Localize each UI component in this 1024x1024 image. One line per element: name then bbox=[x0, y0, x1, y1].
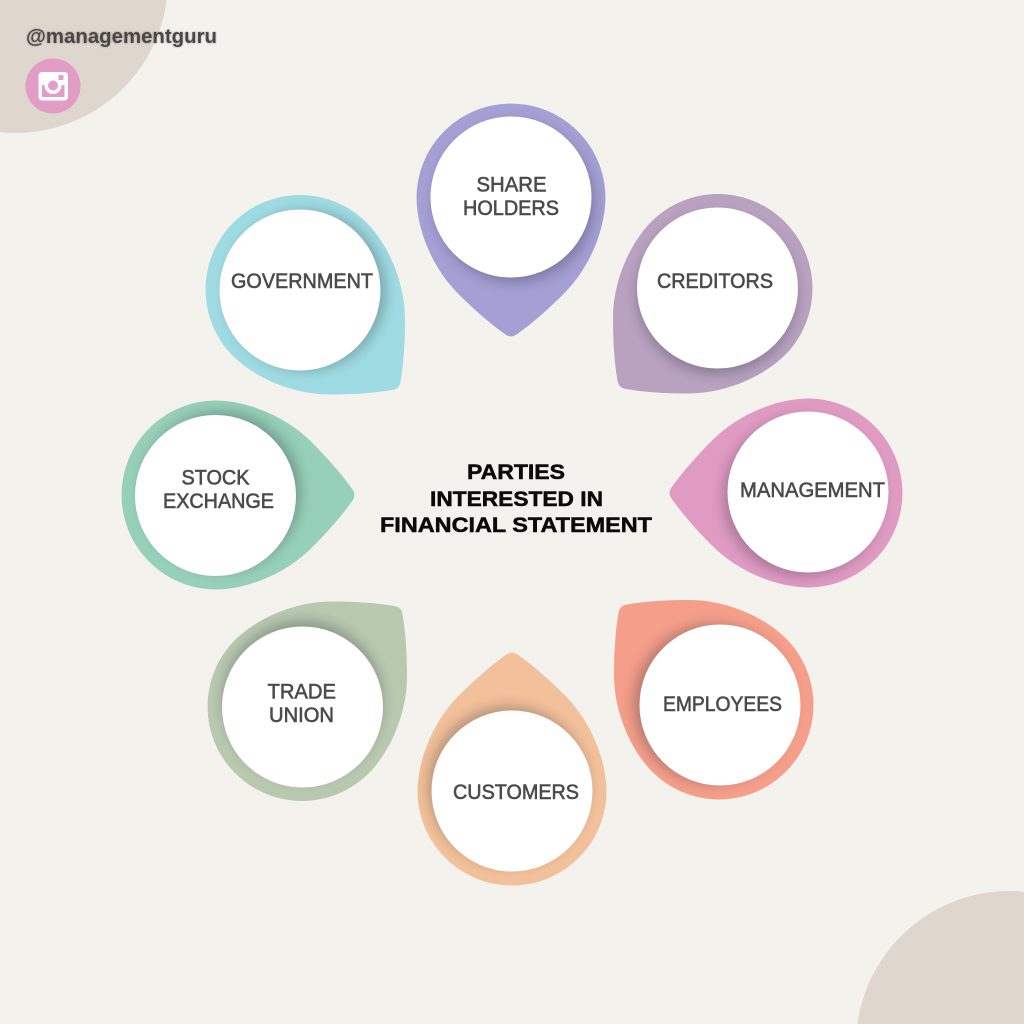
teardrop: customers bbox=[418, 652, 606, 886]
teardrop: trade union bbox=[208, 602, 407, 801]
teardrop: share holders bbox=[416, 104, 606, 336]
teardrop: stock exchange: STOCK bbox=[182, 467, 250, 490]
title: PARTIES bbox=[467, 461, 565, 484]
title: FINANCIAL STATEMENT bbox=[380, 514, 652, 537]
teardrop: stock exchange bbox=[122, 400, 354, 590]
teardrop: creditors: CREDITORS bbox=[657, 270, 773, 293]
title bbox=[380, 461, 652, 537]
title: INTERESTED IN bbox=[430, 488, 603, 511]
teardrop: management bbox=[670, 398, 902, 588]
corner blob: top left bbox=[0, 0, 167, 133]
icon: instagram bbox=[26, 58, 80, 114]
teardrop: trade union: UNION bbox=[269, 704, 334, 727]
teardrop: government bbox=[206, 195, 405, 394]
corner blob: bottom right bbox=[857, 891, 1024, 1024]
teardrop: government: GOVERNMENT bbox=[231, 270, 373, 293]
social handle: @managementguru bbox=[26, 26, 217, 48]
teardrop: creditors bbox=[613, 194, 812, 394]
teardrop: trade union: TRADE bbox=[268, 681, 336, 704]
teardrop: share holders: HOLDERS bbox=[463, 197, 559, 220]
teardrop: employees: EMPLOYEES bbox=[663, 693, 782, 716]
teardrop: employees bbox=[614, 600, 813, 799]
teardrop: management: MANAGEMENT bbox=[740, 479, 885, 502]
teardrop: share holders: SHARE bbox=[476, 174, 546, 196]
teardrop: stock exchange: EXCHANGE bbox=[163, 490, 274, 513]
teardrop: customers: CUSTOMERS bbox=[453, 781, 579, 804]
